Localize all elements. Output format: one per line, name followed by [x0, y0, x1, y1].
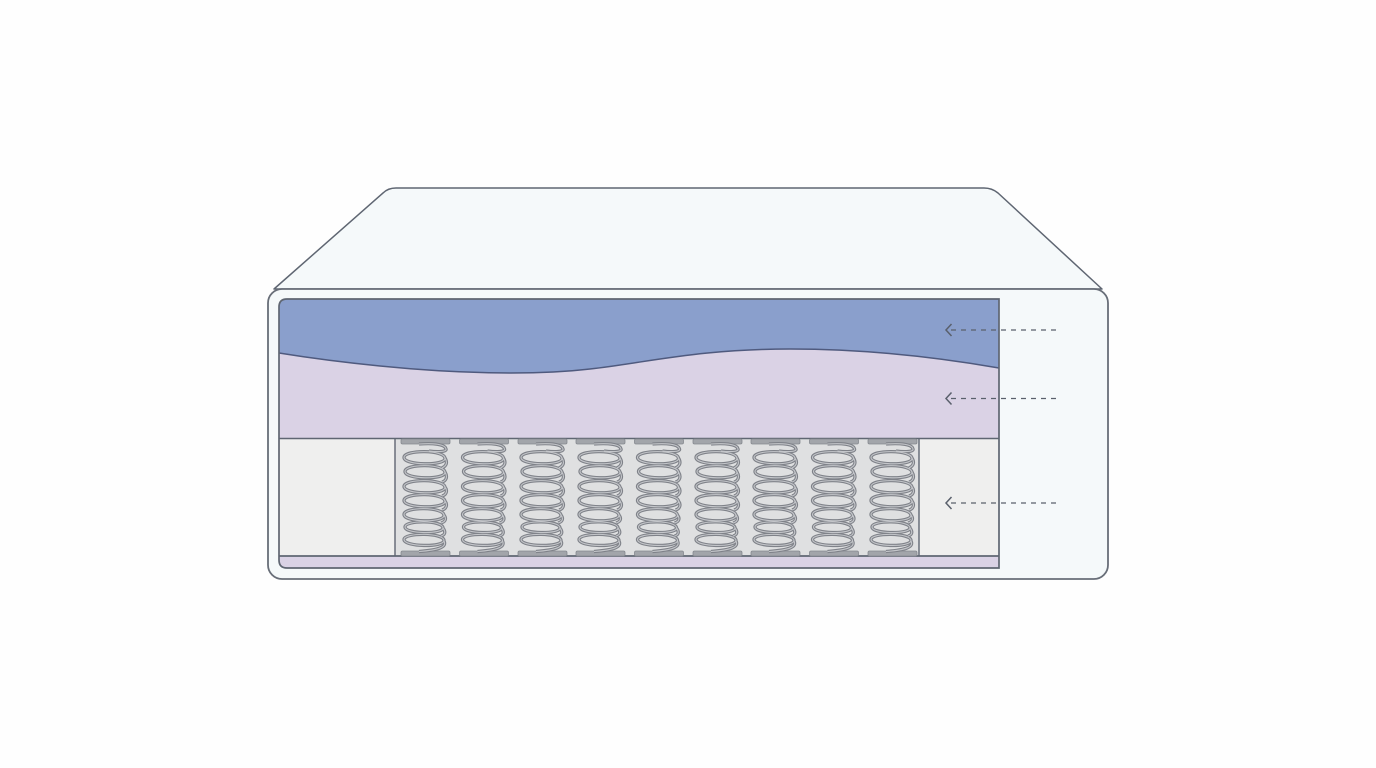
- spring 4: [576, 439, 625, 556]
- pocket springs row: [401, 439, 917, 556]
- spring 5: [634, 439, 684, 556]
- mattress cross-section diagram: [267, 187, 1109, 580]
- arrow: comfort foam layer: [946, 392, 1056, 404]
- arrow: spring core layer: [946, 497, 1056, 509]
- layer: lavender base: [279, 556, 999, 568]
- spring 8: [810, 439, 858, 556]
- spring 1: [401, 439, 450, 556]
- layer: spring core background: [395, 439, 919, 556]
- spring 6: [693, 439, 742, 556]
- layer: white side support left: [279, 439, 395, 556]
- mattress top surface: [274, 188, 1102, 289]
- layer outlines: [279, 299, 999, 568]
- arrow: top foam layer: [946, 324, 1056, 336]
- cutaway layers: [279, 299, 999, 568]
- layer: lavender comfort foam: [279, 345, 999, 439]
- spring 7: [751, 439, 800, 556]
- spring 9: [868, 439, 917, 556]
- layer: blue top foam: [279, 299, 999, 373]
- layer: white side support right: [919, 439, 999, 556]
- mattress front face: [268, 289, 1108, 579]
- spring 2: [460, 439, 508, 556]
- spring 3: [518, 439, 567, 556]
